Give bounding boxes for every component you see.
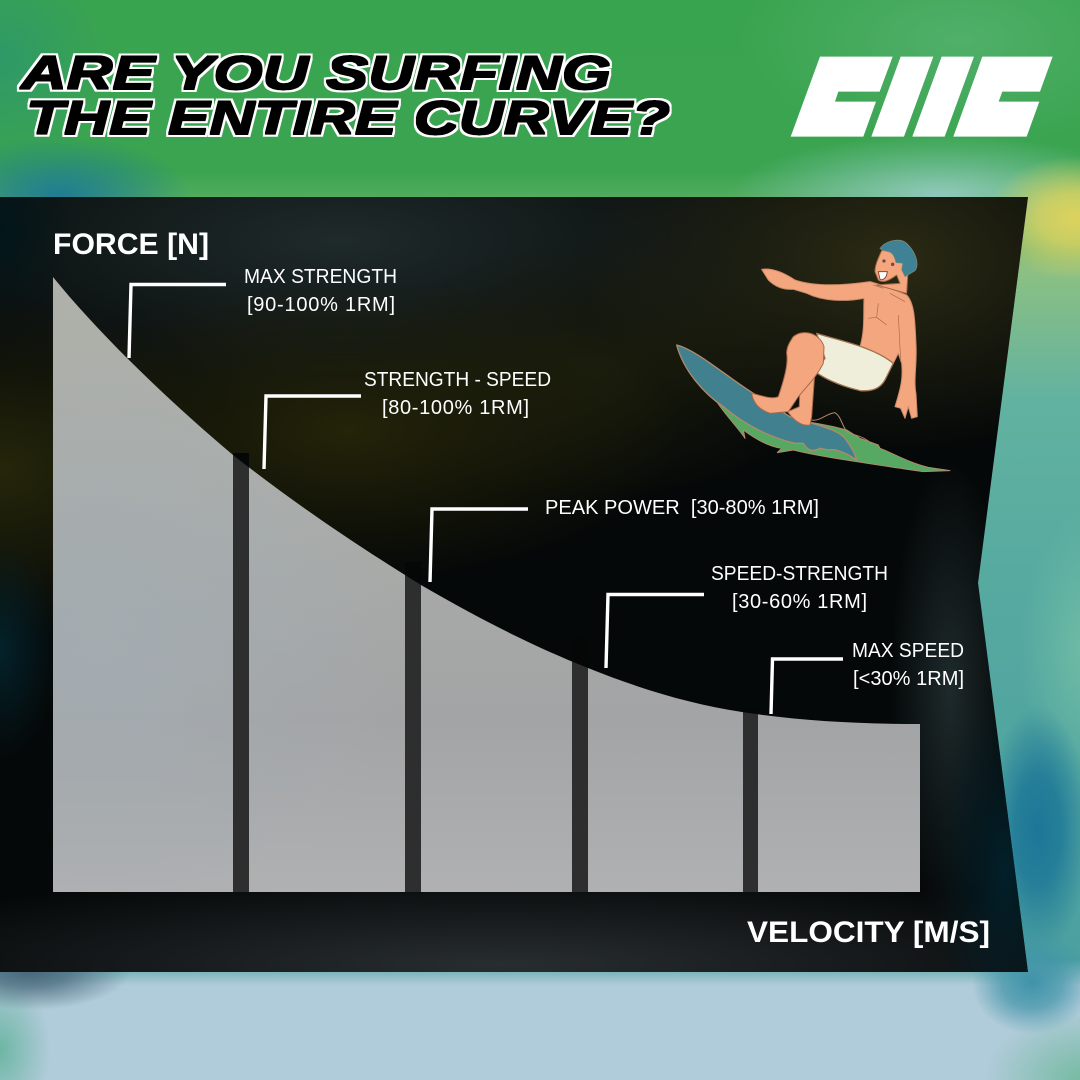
callout: strength speed [264, 396, 361, 469]
shorts [815, 333, 893, 391]
leash [812, 413, 872, 444]
label: max speed [852, 640, 964, 690]
label: max speed: MAX SPEED [852, 640, 964, 662]
board [677, 345, 857, 460]
front leg [752, 333, 824, 413]
hair [880, 240, 917, 277]
label: max speed: [<30% 1RM] [853, 668, 964, 690]
chart: force-velocity curve [53, 277, 920, 892]
callout lines [129, 284, 843, 714]
back leg [788, 370, 815, 425]
label: strength speed [364, 369, 551, 419]
label: speed strength: [30-60% 1RM] [732, 591, 867, 613]
callout: max speed [771, 659, 843, 714]
label: max strength: [90-100% 1RM] [247, 294, 395, 316]
logo [791, 57, 1053, 137]
icon: surfer on a wave [677, 240, 950, 472]
label: speed strength [711, 563, 888, 613]
label: peak power: PEAK POWER [30-80% 1RM] [545, 497, 819, 519]
label: strength speed: STRENGTH - SPEED [364, 369, 551, 391]
label: max strength: MAX STRENGTH [244, 266, 397, 288]
axis label: velocity: VELOCITY [M/S] [747, 916, 990, 949]
chest lines [868, 285, 905, 360]
title: ARE YOU SURFING [20, 46, 611, 99]
curve area tint [53, 277, 421, 892]
label: max strength [244, 266, 397, 316]
torso and arms [762, 269, 917, 418]
bar dividers above curve [233, 453, 758, 720]
callout: speed strength [606, 594, 704, 668]
curve area [53, 277, 920, 892]
eyes and mouth [878, 259, 894, 280]
panel: dark chart background [0, 197, 1028, 972]
bar dividers [233, 440, 758, 892]
head [875, 250, 908, 293]
callout: max strength [129, 284, 226, 358]
label: speed strength: SPEED-STRENGTH [711, 563, 888, 585]
wave [717, 402, 950, 472]
axis label: force: FORCE [N] [53, 228, 209, 261]
callout: peak power [430, 509, 528, 582]
title: THE ENTIRE CURVE? [26, 91, 670, 144]
title [20, 46, 670, 144]
label: strength speed: [80-100% 1RM] [382, 397, 529, 419]
